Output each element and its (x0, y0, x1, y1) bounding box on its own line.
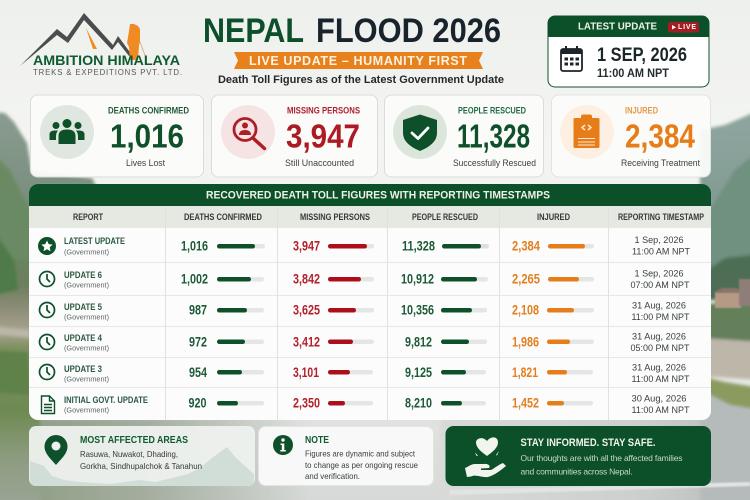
label: DEATHS CONFIRMED (108, 106, 189, 116)
row: latest update: (Government) (64, 248, 109, 256)
row: update 4: 9,812 (405, 334, 432, 350)
badge: live: LIVE (678, 24, 696, 31)
badge: live (668, 22, 699, 32)
icon: clock (40, 272, 54, 286)
subtitle: Death Toll Figures as of the Latest Government Update (218, 74, 504, 86)
row: update 3: 9,125 (405, 365, 432, 380)
icon: heart in hand (465, 437, 506, 477)
row: latest update: 2,384 (512, 238, 540, 254)
note text: to change as per ongoing rescue (305, 460, 418, 470)
row: update 3: 11:00 AM NPT (632, 374, 690, 384)
icon: clipboard (574, 114, 600, 148)
row: update 5: 3,625 (293, 302, 320, 318)
row: latest update: 3,947 (293, 238, 320, 254)
row: update 4: (Government) (64, 344, 109, 352)
title (203, 12, 501, 50)
row: initial govt. update: 2,350 (293, 396, 320, 410)
value: 1,016 (110, 118, 184, 154)
row: update 5 (40, 300, 690, 322)
table heading: RECOVERED DEATH TOLL FIGURES WITH REPORTING TIMESTAMPS (206, 189, 550, 201)
heading: NOTE (305, 435, 329, 446)
row: update 3: 1,821 (512, 365, 538, 380)
row: update 5: 31 Aug, 2026 (632, 300, 686, 310)
caption: Lives Lost (126, 158, 165, 168)
message: Our thoughts are with all the affected families (520, 453, 682, 463)
panel: latest update (548, 16, 709, 87)
row: initial govt. update: 11:00 AM NPT (632, 405, 690, 415)
row: initial govt. update: 30 Aug, 2026 (632, 394, 687, 404)
row: latest update: 1 Sep, 2026 (634, 235, 684, 245)
note text: Figures are dynamic and subject (305, 448, 416, 458)
message: and communities across Nepal. (520, 466, 632, 476)
row: initial govt. update: INITIAL GOVT. UPDATE (64, 395, 148, 405)
panel: stay informed (446, 426, 711, 486)
row: update 5: 10,356 (401, 302, 434, 318)
icon: clock (40, 334, 54, 350)
row: update 5: 2,108 (512, 302, 539, 318)
banner: live update: LIVE UPDATE – HUMANITY FIRST (249, 54, 467, 68)
row: update 3: (Government) (64, 374, 109, 384)
column headers: DEATHS CONFIRMED (184, 212, 262, 222)
label: latest update: LATEST UPDATE (578, 22, 657, 32)
message (520, 453, 682, 476)
value: 2,384 (625, 118, 696, 154)
row: update 4: 05:00 PM NPT (630, 343, 690, 353)
row: update 6: UPDATE 6 (64, 270, 102, 280)
note text: and verification. (305, 471, 360, 481)
row: update 6 (40, 268, 690, 290)
column headers: PEOPLE RESCUED (412, 212, 478, 222)
icon: clock (40, 364, 54, 380)
icon: people (50, 119, 84, 144)
column headers: INJURED (537, 212, 570, 222)
row: initial govt. update (42, 394, 690, 415)
illustration: mountain watermark (30, 447, 254, 486)
icon: clock (40, 302, 54, 318)
row: update 4: 972 (189, 334, 207, 350)
stat card: injured (552, 95, 710, 177)
row: initial govt. update: (Government) (64, 406, 109, 414)
row: update 3: 31 Aug, 2026 (632, 362, 686, 372)
title: FLOOD 2026 (316, 12, 501, 50)
row: update 4: 1,986 (512, 334, 539, 350)
row: update 6: 1 Sep, 2026 (634, 268, 684, 278)
logo: Ambition Himalaya (20, 13, 182, 77)
row: update 6: 10,912 (401, 272, 434, 286)
icon: star badge (38, 237, 56, 255)
row: update 3: 3,101 (293, 365, 319, 380)
row: latest update: 11,328 (402, 238, 435, 254)
row: update 5: 987 (189, 302, 207, 318)
time: 11:00 AM NPT (597, 66, 670, 80)
row: update 6: 3,842 (293, 272, 320, 286)
heading: STAY INFORMED. STAY SAFE. (520, 437, 656, 449)
row: update 6: 07:00 AM NPT (630, 280, 690, 290)
icon: shield with check (403, 114, 437, 151)
icon: mountain outline (20, 13, 132, 66)
row: latest update (38, 235, 691, 256)
icon: hiker (127, 24, 146, 60)
icon: calendar (561, 46, 582, 71)
brand tagline: TREKS & EXPEDITIONS PVT. LTD. (33, 68, 182, 77)
panel: most affected areas (29, 426, 255, 486)
caption: Successfully Rescued (453, 158, 536, 168)
row: initial govt. update: 1,452 (512, 396, 539, 410)
list of districts: Rasuwa, Nuwakot, Dhading, (80, 449, 178, 459)
row: update 4 (40, 332, 690, 353)
row: initial govt. update: 920 (188, 396, 206, 410)
icon: info (273, 435, 293, 455)
title: NEPAL (203, 12, 304, 50)
column headers: REPORT (73, 212, 103, 222)
icon: orange ridge highlight (86, 28, 97, 49)
row: update 5: 11:00 PM NPT (632, 312, 690, 322)
label: PEOPLE RESCUED (458, 106, 526, 116)
note text (305, 448, 418, 481)
row: update 6: (Government) (64, 280, 109, 290)
list of districts (80, 449, 202, 471)
label: INJURED (625, 106, 658, 116)
brand name: AMBITION HIMALAYA (33, 53, 180, 68)
table panel: recovered death toll figures (29, 184, 711, 420)
date: 1 SEP, 2026 (597, 44, 687, 66)
value: 3,947 (286, 118, 360, 154)
row: latest update: LATEST UPDATE (64, 236, 125, 246)
row: update 5: UPDATE 5 (64, 302, 102, 312)
icon: document (42, 396, 54, 414)
row: update 3: 954 (189, 365, 207, 380)
row: update 6: 1,002 (181, 272, 208, 286)
stat card: people rescued (384, 95, 544, 177)
row: update 4: 31 Aug, 2026 (632, 332, 686, 342)
stat card: deaths confirmed (30, 95, 204, 177)
caption: Still Unaccounted (285, 158, 354, 168)
row: update 3 (40, 362, 690, 384)
icon: location pin (44, 435, 68, 465)
stat card: missing persons (212, 95, 378, 177)
heading: MOST AFFECTED AREAS (80, 435, 188, 446)
row: update 5: (Government) (64, 312, 109, 322)
row: update 4: UPDATE 4 (64, 333, 102, 343)
row: latest update: 1,016 (181, 238, 208, 254)
value: 11,328 (457, 118, 530, 154)
row: update 3: UPDATE 3 (64, 364, 102, 374)
panel: note (258, 426, 434, 486)
row: update 6: 2,265 (512, 272, 540, 286)
row: latest update: 11:00 AM NPT (632, 246, 691, 256)
label: MISSING PERSONS (287, 106, 360, 116)
list of districts: Gorkha, Sindhupalchok & Tanahun (80, 461, 202, 471)
row: update 4: 3,412 (293, 334, 320, 350)
column headers: REPORTING TIMESTAMP (618, 212, 704, 222)
column headers: MISSING PERSONS (300, 212, 370, 222)
icon: magnifier with person (234, 118, 264, 148)
row: initial govt. update: 8,210 (405, 396, 432, 410)
caption: Receiving Treatment (621, 158, 700, 168)
column headers (29, 206, 711, 228)
